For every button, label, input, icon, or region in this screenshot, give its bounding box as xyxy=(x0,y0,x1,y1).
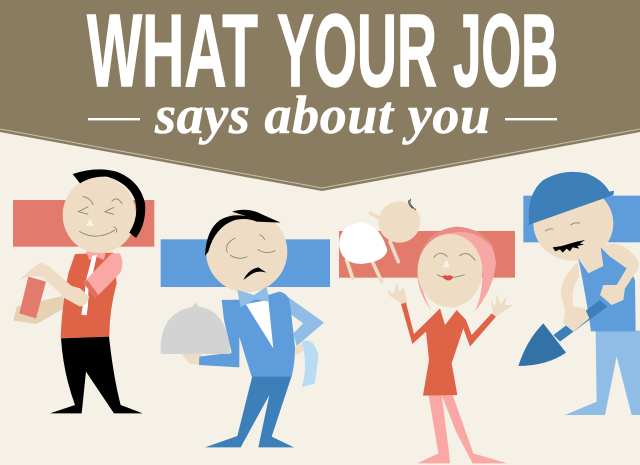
title xyxy=(87,0,558,108)
worker tank top xyxy=(578,247,636,331)
waiter head xyxy=(206,211,287,292)
subtitle: says about you xyxy=(154,85,490,145)
napkin xyxy=(302,341,318,387)
waiter hand xyxy=(182,354,202,365)
bartender collar xyxy=(86,251,106,260)
blue label bar xyxy=(523,196,640,242)
serving cloche xyxy=(161,303,231,354)
character: construction worker xyxy=(518,172,640,415)
header banner xyxy=(0,0,640,191)
nanny hands xyxy=(387,283,513,317)
bow tie xyxy=(237,287,269,307)
bartender sleeve xyxy=(83,253,122,298)
tie xyxy=(81,255,97,315)
bartender shirt xyxy=(61,253,117,338)
nanny face xyxy=(434,253,475,278)
nanny dress xyxy=(401,303,496,396)
blue label bar xyxy=(161,239,330,287)
worker mouth xyxy=(553,240,585,253)
cocktail shaker xyxy=(19,277,46,318)
worker arms xyxy=(561,262,589,332)
red label bar xyxy=(13,200,154,247)
worker face xyxy=(545,223,580,231)
character: nanny xyxy=(339,199,515,463)
waiter jacket xyxy=(199,292,295,377)
baby diaper xyxy=(339,222,387,264)
waiter face xyxy=(227,235,275,258)
character: waiter xyxy=(161,210,330,447)
waiter hair xyxy=(205,210,281,256)
character: bartender xyxy=(13,169,154,413)
waiter far arm xyxy=(287,296,324,346)
nanny head xyxy=(418,234,482,307)
hard hat xyxy=(527,172,614,226)
mustache xyxy=(243,267,267,280)
baby limbs xyxy=(347,213,398,282)
waiter shirt xyxy=(246,300,273,348)
bartender lower arm xyxy=(13,296,67,324)
baby hair xyxy=(409,199,416,210)
worker neck xyxy=(578,245,604,274)
worker trousers xyxy=(565,331,640,415)
nanny legs xyxy=(417,395,450,463)
worker head xyxy=(533,186,613,261)
shovel xyxy=(518,300,607,366)
bartender hair xyxy=(73,169,145,238)
bartender head xyxy=(63,177,136,253)
waiter trousers xyxy=(205,376,294,447)
nanny hair xyxy=(417,227,496,312)
bartender face xyxy=(78,197,122,236)
bartender upper arm xyxy=(19,263,89,307)
baby head xyxy=(378,201,420,243)
nanny lips xyxy=(442,275,453,281)
bartender trousers xyxy=(50,337,143,413)
red label bar xyxy=(339,231,515,278)
